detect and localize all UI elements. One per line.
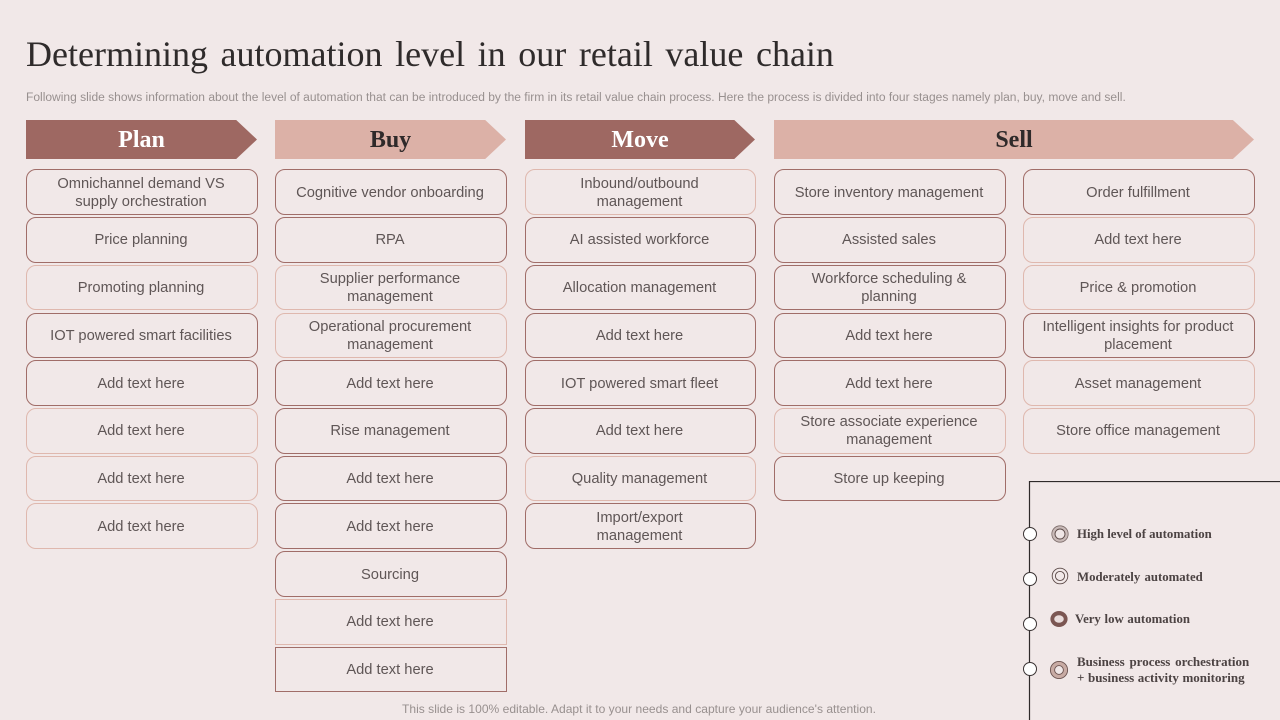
sell item 3: planning <box>861 288 917 304</box>
move item 1 <box>525 169 756 215</box>
panel: Sell column two <box>1023 169 1255 454</box>
sell item 11: Intelligent insights for product <box>1042 318 1234 334</box>
sell item 6 <box>774 408 1006 454</box>
header: Move <box>525 120 755 159</box>
panel: Buy column <box>275 169 507 692</box>
buy item 4 <box>275 313 507 358</box>
plan item 4: IOT powered smart facilities <box>50 328 232 344</box>
sell item 7: Store up keeping <box>833 470 945 486</box>
plan item 2: Price planning <box>94 232 188 248</box>
sell item 7 <box>774 456 1006 501</box>
plan item 5 <box>26 360 258 406</box>
move item 1: Inbound/outbound <box>580 176 699 192</box>
label: high level of automation: High level of automation <box>1077 527 1212 541</box>
subtitle: Following slide shows information about the level of automation that can be introduced by the firm in its retail value chain process. Here the process is divided into four stages namely plan, buy, move and sell. <box>26 90 1126 104</box>
plan item 6 <box>26 408 258 454</box>
buy item 9 <box>275 551 507 597</box>
panel: Move column <box>525 169 756 549</box>
move item 7: Quality management <box>572 470 707 486</box>
sell item 8 <box>1023 169 1255 215</box>
sell item 11: placement <box>1104 336 1172 352</box>
sell item 4: Add text here <box>845 328 933 344</box>
panel: Sell column one <box>774 169 1006 501</box>
plan item 7: Add text here <box>97 470 185 486</box>
sell item 6: Store associate experience <box>800 414 978 430</box>
buy item 3: management <box>347 288 433 304</box>
sell item 2: Assisted sales <box>842 232 936 248</box>
buy item 1: Cognitive vendor onboarding <box>296 185 484 201</box>
buy item 4: management <box>347 336 433 352</box>
buy item 4: Operational procurement <box>309 318 471 334</box>
sell item 10: Price & promotion <box>1080 280 1196 296</box>
sell item 8: Order fulfillment <box>1086 185 1190 201</box>
header: Sell <box>774 120 1254 159</box>
icon: moderately automated <box>1052 568 1068 584</box>
move item 4 <box>525 313 756 358</box>
buy item 3: Supplier performance <box>320 270 460 286</box>
plan item 7 <box>26 456 258 501</box>
move item 8 <box>525 503 756 549</box>
sell item 3: Workforce scheduling & <box>812 270 966 286</box>
label: business process orchestration: Business process orchestration <box>1077 654 1249 669</box>
sell item 2 <box>774 217 1006 263</box>
move item 8: Import/export <box>596 510 683 526</box>
move item 6: Add text here <box>596 423 683 439</box>
header: Plan: Plan <box>118 127 165 153</box>
move item 2: AI assisted workforce <box>570 232 709 248</box>
label: business process orchestration <box>1077 654 1250 685</box>
buy item 1 <box>275 169 507 215</box>
panel: Plan column <box>26 169 258 549</box>
move item 5: IOT powered smart fleet <box>561 376 718 392</box>
plan item 8: Add text here <box>97 519 185 535</box>
plan item 2 <box>26 217 258 263</box>
move item 4: Add text here <box>596 328 683 344</box>
sell item 12 <box>1023 360 1255 406</box>
buy item 3 <box>275 265 507 310</box>
move item 3 <box>525 265 756 310</box>
header: Buy <box>275 120 506 159</box>
plan item 8 <box>26 503 258 549</box>
buy item 7 <box>275 456 507 501</box>
icon: high level of automation <box>1051 525 1069 543</box>
sell item 3 <box>774 265 1006 310</box>
sell item 5 <box>774 360 1006 406</box>
plan item 1: Omnichannel demand VS <box>57 176 225 192</box>
header: Buy: Buy <box>370 127 411 153</box>
buy item 5 <box>275 360 507 406</box>
move item 3: Allocation management <box>563 280 716 296</box>
buy item 7: Add text here <box>346 470 434 486</box>
sell item 9 <box>1023 217 1255 263</box>
sell item 5: Add text here <box>845 376 933 392</box>
sell item 13 <box>1023 408 1255 454</box>
label: moderately automated: Moderately automated <box>1077 570 1203 584</box>
buy item 10 <box>275 599 507 645</box>
sell item 12: Asset management <box>1075 376 1201 392</box>
move item 5 <box>525 360 756 406</box>
plan item 6: Add text here <box>97 423 185 439</box>
buy item 2: RPA <box>375 232 405 248</box>
sell item 1 <box>774 169 1006 215</box>
footer note: This slide is 100% editable. Adapt it to your needs and capture your audience's attention. <box>402 702 876 716</box>
sell item 13: Store office management <box>1056 423 1220 439</box>
label: very low automation: Very low automation <box>1075 612 1190 626</box>
sell item 10 <box>1023 265 1255 310</box>
label: business process orchestration: + business activity monitoring <box>1077 670 1245 685</box>
header: Sell: Sell <box>995 127 1033 153</box>
sell item 1: Store inventory management <box>795 185 983 201</box>
plan item 3: Promoting planning <box>78 280 204 296</box>
sell item 4 <box>774 313 1006 358</box>
buy item 2 <box>275 217 507 263</box>
sell item 9: Add text here <box>1094 232 1182 248</box>
buy item 8: Add text here <box>346 519 434 535</box>
buy item 6: Rise management <box>330 423 450 439</box>
icon: business process orchestration <box>1050 661 1068 679</box>
plan item 4 <box>26 313 258 358</box>
plan item 3 <box>26 265 258 310</box>
title: Determining automation level in our retail value chain <box>26 34 834 74</box>
plan item 1: supply orchestration <box>75 194 207 210</box>
header: Plan <box>26 120 257 159</box>
buy item 6 <box>275 408 507 454</box>
buy item 5: Add text here <box>346 376 434 392</box>
sell item 6: management <box>846 432 932 448</box>
move item 1: management <box>597 194 682 210</box>
buy item 10: Add text here <box>346 614 434 630</box>
buy item 8 <box>275 503 507 549</box>
buy item 11: Add text here <box>346 662 434 678</box>
buy item 9: Sourcing <box>361 567 419 583</box>
move item 6 <box>525 408 756 454</box>
buy item 11 <box>275 647 507 692</box>
panel: legend <box>1023 481 1280 720</box>
plan item 5: Add text here <box>97 376 185 392</box>
move item 8: management <box>597 528 682 544</box>
sell item 11 <box>1023 313 1255 358</box>
icon: very low automation <box>1050 611 1068 627</box>
move item 7 <box>525 456 756 501</box>
move item 2 <box>525 217 756 263</box>
plan item 1 <box>26 169 258 215</box>
header: Move: Move <box>611 127 669 153</box>
